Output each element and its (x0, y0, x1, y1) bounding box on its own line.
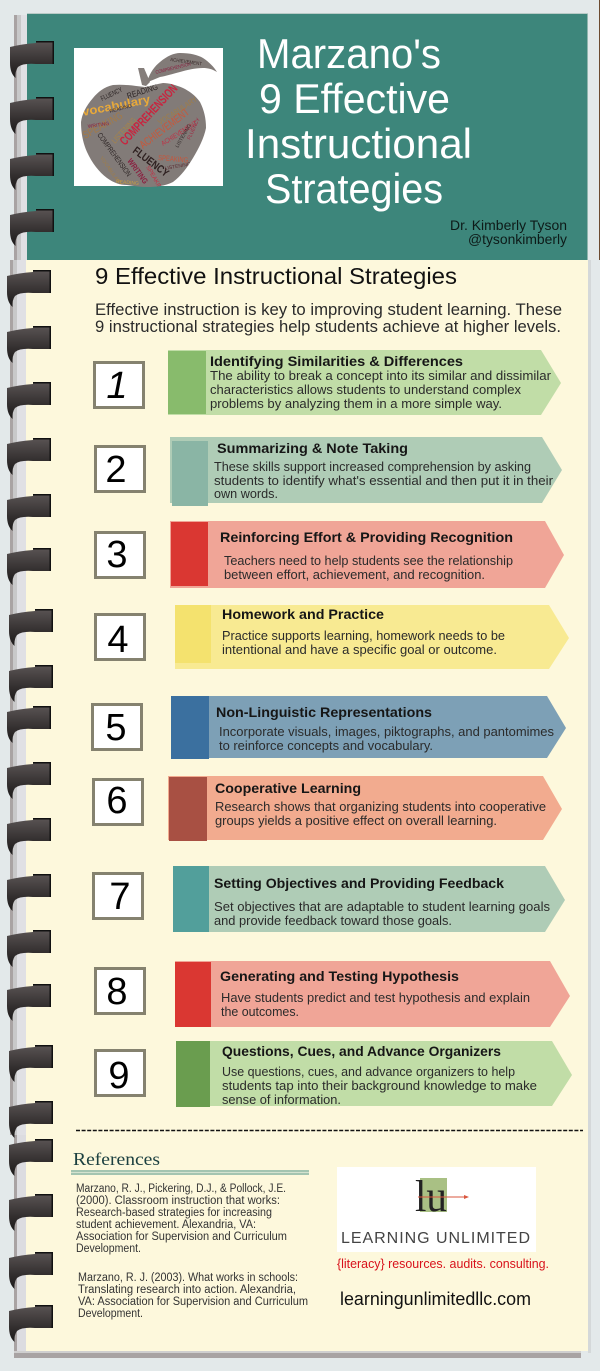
number box 2 (96, 446, 144, 492)
icon: word cloud apple: SPEAKING (81, 110, 125, 142)
icon: word cloud apple: ACHIEVEMENT (138, 106, 192, 151)
icon: word cloud apple: FLUENCY (186, 117, 202, 141)
number box 6: 6 (106, 780, 128, 822)
intro text (95, 300, 562, 336)
number box 8: 8 (106, 971, 128, 1013)
icon: word cloud apple: LISTENING (110, 116, 138, 145)
arrow banner 3 (170, 521, 564, 588)
website: learningunlimitedllc.com (340, 1289, 531, 1309)
number box 3: 3 (106, 534, 128, 576)
icon: word cloud apple: WRITING (87, 121, 110, 130)
arrow banner 9: students tap into their background knowledge to make (222, 1079, 537, 1093)
arrow banner 7: and provide feedback toward those goals. (214, 914, 452, 928)
number box 2: 2 (105, 449, 127, 491)
title: 9 Effective (259, 75, 450, 122)
icon: word cloud apple: ACHIEVEMENT (160, 120, 199, 148)
reference 2: Translating research into action. Alexandria, (78, 1284, 296, 1296)
reference 2 (78, 1272, 308, 1320)
heading: 9 Effective Instructional Strategies (95, 263, 457, 289)
arrow banner 2: students to identify what's essential and then put it in their (214, 474, 553, 488)
reference 1: student achievement. Alexandria, VA: (76, 1219, 256, 1231)
arrow banner 1 (168, 350, 561, 415)
icon: word cloud apple: LISTENING (164, 161, 191, 172)
arrow banner 3: between effort, achievement, and recognition. (224, 568, 485, 582)
strategy 6 (94, 776, 562, 841)
spiral binding rings (7, 41, 54, 1342)
number box 3 (96, 532, 144, 578)
references heading: References (73, 1149, 160, 1169)
intro text: 9 instructional strategies help students achieve at higher levels. (95, 317, 561, 336)
icon: word cloud apple: WRITING (125, 157, 150, 186)
arrow banner 8: Generating and Testing Hypothesis (220, 968, 459, 984)
arrow banner 4: Practice supports learning, homework needs to be (222, 629, 505, 643)
icon: word cloud apple: READING (109, 103, 133, 115)
arrow banner 9: Questions, Cues, and Advance Organizers (222, 1043, 501, 1059)
arrow banner 8: the outcomes. (221, 1005, 299, 1019)
arrow banner 7: Setting Objectives and Providing Feedback (214, 875, 504, 891)
icon: word cloud apple: READING (116, 179, 139, 187)
number box 9 (96, 1050, 144, 1097)
icon: word cloud apple: COMPREHENSION (117, 81, 180, 148)
number box 6 (94, 780, 142, 824)
icon: word cloud apple: SPEAKING (144, 165, 165, 195)
arrow banner 2: These skills support increased comprehension by asking (214, 460, 531, 474)
arrow banner 9 (176, 1041, 572, 1107)
reference 1: Development. (76, 1243, 141, 1255)
icon: word cloud apple: VOCABULARY (156, 95, 199, 127)
reference 1 (76, 1183, 287, 1255)
author credit: @tysonkimberly (468, 231, 567, 247)
strategy 4 (96, 605, 569, 669)
arrow banner 6: groups yields a positive effect on overall learning. (215, 814, 497, 828)
icon: word cloud apple: VOCABULARY (98, 156, 123, 188)
strategy 5 (92, 696, 566, 759)
logo: Learning Unlimited: LEARNING UNLIMITED (341, 1230, 530, 1247)
reference 1: Marzano, R. J., Pickering, D.J., & Pollock, J.E. (76, 1183, 286, 1195)
reference 1: (2000). Classroom instruction that works: (76, 1195, 280, 1207)
arrow banner 1: The ability to break a concept into its similar and dissimilar (210, 369, 551, 383)
number box 1: 1 (106, 365, 128, 407)
author credit (450, 217, 567, 247)
number box 5: 5 (105, 707, 127, 749)
icon: word cloud apple: ACHIEVEMENT (170, 57, 202, 67)
panel: header (27, 13, 588, 260)
arrow banner 2: own words. (214, 487, 278, 501)
arrow banner 4: Homework and Practice (222, 606, 384, 622)
icon: word cloud apple: READING (126, 82, 159, 101)
title: Instructional (245, 120, 472, 167)
number box 4: 4 (107, 619, 129, 661)
arrow banner 1: characteristics allows students to understand complex (210, 383, 522, 397)
arrow banner 3: Teachers need to help students see the relationship (224, 554, 513, 568)
reference 2: Development. (78, 1308, 143, 1320)
icon: word cloud apple: SPEAKING (158, 153, 189, 165)
arrow banner 9: sense of information. (222, 1093, 341, 1107)
arrow banner 4 (175, 605, 569, 669)
arrow banner 9: Use questions, cues, and advance organizers to help (222, 1065, 515, 1079)
reference 2: Marzano, R. J. (2003). What works in schools: (78, 1272, 298, 1284)
arrow banner 8: Have students predict and test hypothesis and explain (221, 991, 530, 1005)
title: Marzano's (257, 30, 441, 77)
arrow banner 5: Non-Linguistic Representations (216, 704, 432, 720)
number box 4 (96, 614, 144, 661)
icon: word cloud apple (74, 48, 223, 195)
strategy 7 (94, 866, 565, 932)
number box 7: 7 (109, 876, 131, 918)
strategy 2 (96, 437, 562, 506)
author credit: Dr. Kimberly Tyson (450, 217, 567, 233)
arrow banner 6 (168, 776, 562, 841)
arrow banner 5: to reinforce concepts and vocabulary. (219, 739, 433, 753)
arrow banner 2: Summarizing & Note Taking (217, 440, 408, 456)
tagline: {literacy} resources. audits. consulting. (337, 1256, 549, 1271)
arrow banner 5: Incorporate visuals, images, piktographs, and pantomimes (219, 725, 554, 739)
strategy 8 (96, 961, 570, 1027)
arrow banner 1: problems by analyzing them in a more simple way. (210, 397, 502, 411)
arrow banner 2 (170, 437, 562, 506)
arrow banner 6: Research shows that organizing students into cooperative (215, 800, 546, 814)
title (245, 30, 472, 212)
reference 1: Association for Supervision and Curriculum (76, 1231, 287, 1243)
reference 1: Research-based strategies for increasing (76, 1207, 272, 1219)
icon: word cloud apple: FLUENCY (100, 87, 124, 103)
arrow banner 6: Cooperative Learning (215, 780, 361, 796)
number box 9: 9 (108, 1055, 130, 1097)
intro text: Effective instruction is key to improving student learning. These (95, 300, 562, 319)
strategy 3 (96, 521, 564, 588)
arrow banner 5 (171, 696, 566, 759)
icon: word cloud apple: COMPREHENSION (155, 61, 192, 76)
title: Strategies (265, 165, 443, 212)
icon: word cloud apple: vocabulary (81, 92, 152, 119)
number box 5 (92, 704, 142, 750)
references heading (71, 1149, 309, 1175)
icon: word cloud apple: FLUENCY (130, 145, 171, 180)
arrow banner 1: Identifying Similarities & Differences (210, 353, 463, 369)
arrow banner 7 (173, 866, 565, 932)
icon: word cloud apple: COMPREHENSION (95, 131, 133, 178)
icon: word cloud apple: LISTENING (175, 123, 193, 149)
strategy 1 (94, 350, 561, 415)
panel: strategies page (26, 260, 588, 1351)
reference 2: VA: Association for Supervision and Curriculum (78, 1296, 308, 1308)
logo: Learning Unlimited (337, 1167, 536, 1252)
number box 1 (94, 362, 144, 408)
arrow banner 7: Set objectives that are adaptable to student learning goals (214, 900, 550, 914)
number box 8 (96, 968, 144, 1014)
number box 7 (94, 874, 142, 918)
logo: Learning Unlimited: lu (415, 1172, 447, 1221)
strategy 9 (96, 1041, 572, 1107)
arrow banner 3: Reinforcing Effort & Providing Recognition (220, 529, 513, 545)
arrow banner 8 (175, 961, 570, 1027)
arrow banner 4: intentional and have a specific goal or outcome. (222, 643, 497, 657)
